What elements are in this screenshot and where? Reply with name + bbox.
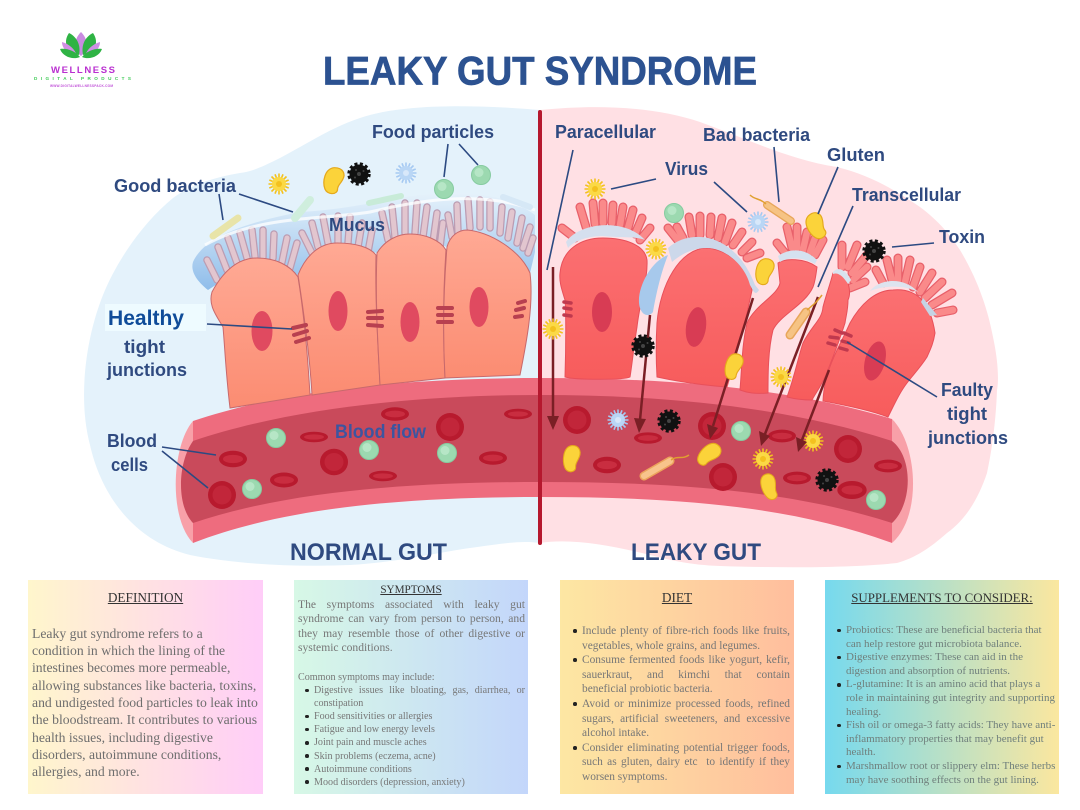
labels: Food particles [372, 122, 494, 142]
leader lines [162, 144, 937, 488]
text: symptoms list: Skin problems (eczema, acne) [314, 751, 436, 762]
text: symptoms list: constipation [314, 698, 363, 709]
text: definition body: health issues, including digestive [32, 730, 213, 745]
text: supplements list: Digestive enzymes: These can aid in the [846, 651, 1023, 663]
text: supplements list: Probiotics: These are beneficial bacteria that [846, 624, 1042, 636]
labels: Gluten [827, 145, 885, 165]
text: diet list: Avoid or minimize processed foods, refined [582, 698, 790, 710]
gut illustration [34, 32, 1008, 568]
red blood cells [208, 406, 902, 509]
labels: junctions [106, 359, 187, 380]
logo: WWW.DIGITALWELLNESSPACK.COM [50, 84, 113, 88]
labels: Blood flow [335, 422, 426, 443]
text: diet list: beneficial probiotic bacteria. [582, 683, 713, 695]
mucus highlight [205, 199, 535, 245]
text: diet list: worsen symptoms. [582, 771, 667, 783]
labels: Healthy [108, 307, 184, 330]
heading: supplements: SUPPLEMENTS TO CONSIDER: [851, 591, 1033, 605]
labels: LEAKY GUT [631, 539, 761, 566]
text: symptoms intro: The symptoms associated with leaky gut [298, 598, 525, 610]
logo: DIGITAL PRODUCTS [34, 76, 131, 81]
labels: NORMAL GUT [290, 539, 447, 566]
epithelial cells: normal gut [211, 230, 531, 408]
text: diet list: Consume fermented foods like yogurt, kefir, [582, 654, 790, 666]
panel: definition [28, 580, 263, 794]
blood vessel [176, 378, 913, 543]
text: diet list: sauerkraut, and kimchi that contain [582, 669, 790, 681]
text: symptoms list: Autoimmune conditions [314, 764, 412, 775]
text: supplements list: health. [846, 746, 876, 758]
panel: supplements [825, 580, 1059, 794]
background: normal gut blob [84, 106, 540, 566]
labels: Mucus [329, 215, 385, 235]
text: symptoms list: Common symptoms may include: [298, 672, 435, 683]
heading: diet: DIET [662, 590, 692, 605]
text: symptoms list: Joint pain and muscle aches [314, 737, 427, 748]
cell nuclei: normal gut [252, 287, 488, 351]
faulty tight junctions [564, 302, 851, 350]
labels: Faulty [941, 379, 994, 400]
text: symptoms list: Digestive issues like bloating, gas, diarrhea, or [314, 685, 525, 696]
text: supplements list: digestion and absorption of nutrients. [846, 665, 1010, 677]
healthy tight junctions [293, 301, 525, 342]
text: supplements list: may have soothing effects on the gut lining. [846, 774, 1039, 786]
text: supplements list: L-glutamine: It is an amino acid that plays a [846, 678, 1040, 690]
microvilli: normal gut [207, 200, 533, 280]
labels: Bad bacteria [703, 125, 811, 145]
labels: Good bacteria [114, 176, 237, 196]
text: symptoms intro [298, 598, 525, 654]
pathogens above leaky gut [584, 178, 884, 285]
cell nuclei: leaky gut [592, 292, 890, 383]
text: symptoms intro: systemic conditions. [298, 641, 393, 654]
arrows: leak paths [547, 267, 829, 452]
labels: Blood [107, 430, 157, 451]
labels: junctions [927, 427, 1008, 448]
text: symptoms intro: they may resemble those of other digestive or [298, 627, 525, 640]
mucus layer: normal gut [192, 193, 535, 290]
text: supplements list: can help restore gut microbiota balance. [846, 638, 1022, 650]
text: symptoms list: Food sensitivities or allergies [314, 711, 432, 722]
text: supplements list: Fish oil or omega-3 fatty acids: They have anti- [846, 719, 1055, 731]
microvilli: leaky gut [562, 203, 953, 313]
text: symptoms list: Fatigue and low energy levels [314, 724, 435, 735]
text: supplements list [837, 624, 1055, 786]
text: diet list: such as gluten, dairy etc to identify if they [582, 756, 790, 768]
text: supplements list: Marshmallow root or slippery elm: These herbs [846, 760, 1055, 772]
epithelial cells: leaky gut [560, 238, 935, 417]
text: symptoms list [298, 672, 525, 788]
text: definition body: disorders, autoimmune conditions, [32, 747, 221, 762]
labels [105, 122, 1008, 566]
mucus remnants: leaky gut [566, 225, 937, 316]
text: definition body: the bloodstream. It contributes to various [32, 712, 257, 727]
good bacteria [213, 196, 530, 236]
logo [34, 32, 131, 88]
text: definition body: allowing substances like bacteria, toxins, [32, 678, 256, 693]
labels: Toxin [939, 227, 985, 247]
background: leaky gut blob [540, 107, 998, 567]
logo: WELLNESS [51, 65, 115, 76]
food particles and pathogens above normal gut [268, 162, 490, 198]
text: supplements list: inflammatory properties that may benefit gut [846, 733, 1044, 745]
text: definition body: and undigested food particles to leak into [32, 695, 258, 710]
particles in the blood [242, 410, 886, 510]
text: definition body: allergies, and more. [32, 764, 140, 779]
labels: tight [947, 403, 987, 424]
text: symptoms intro: syndrome can vary from person to person, and [298, 612, 525, 625]
text: diet list: sugars, artificial sweeteners, and excessive [582, 713, 790, 725]
text: definition body: intestines becomes more permeable, [32, 660, 230, 675]
text: definition body: condition in which the lining of the [32, 643, 225, 658]
centre divider [538, 112, 542, 543]
title: LEAKY GUT SYNDROME [323, 50, 757, 94]
labels: tight [124, 336, 165, 357]
panel: diet [560, 580, 794, 794]
heading: definition: DEFINITION [108, 590, 183, 605]
text: diet list: Include plenty of fibre-rich foods like fruits, [582, 625, 790, 637]
text: definition body: Leaky gut syndrome refers to a [32, 626, 203, 640]
labels: cells [111, 454, 148, 475]
particles crossing the barrier [542, 295, 822, 388]
text: diet list [573, 625, 790, 783]
text: diet list: vegetables, whole grains, and legumes. [582, 640, 760, 652]
labels: Paracellular [555, 122, 656, 142]
text: symptoms list: Mood disorders (depression, anxiety) [314, 777, 465, 788]
text: diet list: Consider eliminating potential trigger foods, [582, 742, 790, 754]
panel: symptoms [294, 580, 528, 794]
text: diet list: alcohol intake. [582, 727, 649, 739]
heading: symptoms: SYMPTOMS [380, 584, 442, 596]
text: supplements list: role in maintaining gut integrity and supporting [846, 692, 1055, 704]
labels: Virus [665, 159, 708, 179]
labels: Transcellular [852, 185, 961, 205]
text: definition body [32, 626, 258, 779]
text: supplements list: healing. [846, 706, 881, 718]
